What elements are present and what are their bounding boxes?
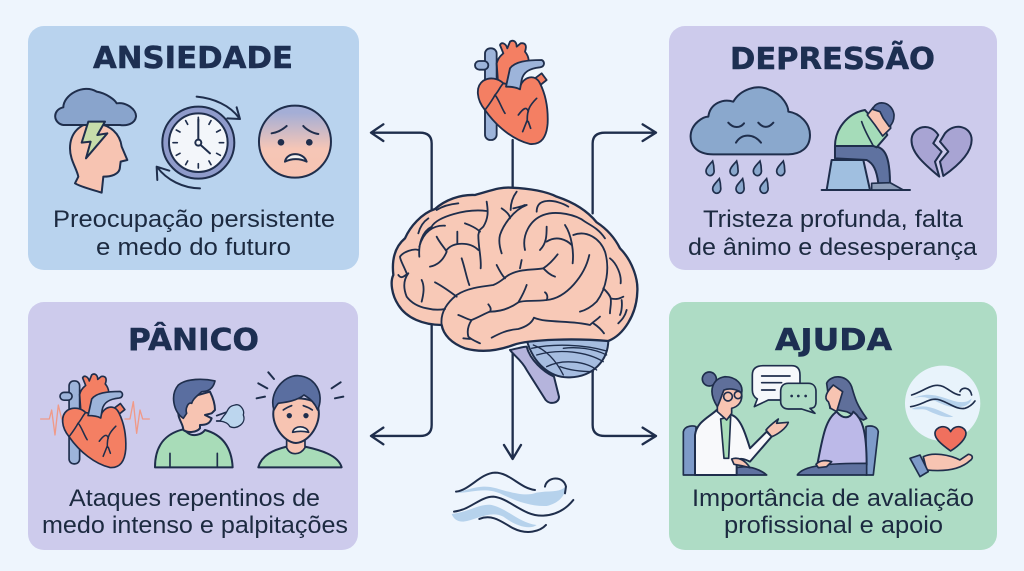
- heading: ansiedade: ANSIEDADE: [93, 41, 293, 76]
- text: depressão description line 2: de ânimo e desesperança: [688, 234, 977, 261]
- cerebrum: [392, 188, 637, 351]
- text: depressão description: Tristeza profunda, falta: [703, 206, 963, 233]
- icon: clock with arrows: [157, 97, 240, 188]
- arrows and connectors: [371, 124, 656, 459]
- text: pânico description: Ataques repentinos de: [69, 485, 320, 512]
- brain stem: [510, 347, 559, 403]
- text: ansiedade description: Preocupação persistente: [53, 206, 335, 233]
- icon: broken heart: [912, 127, 972, 177]
- panel: ansiedade: [28, 26, 359, 270]
- panel background: pânico: [28, 302, 358, 550]
- heading: pânico: PÂNICO: [128, 322, 259, 358]
- heading: ajuda: AJUDA: [775, 323, 892, 358]
- text: ajuda description: Importância de avaliação: [692, 485, 974, 512]
- panel: pânico: [28, 302, 358, 550]
- cerebellum: [527, 337, 608, 377]
- icon: doctor: [683, 372, 788, 475]
- icon: calm circle with heart in hand: [905, 366, 980, 477]
- icon: person sitting head in hands: [822, 103, 910, 190]
- text: ansiedade description line 2: e medo do futuro: [96, 234, 291, 261]
- panel background: depressão: [669, 26, 997, 270]
- panel: ajuda: [669, 302, 997, 550]
- brain illustration: [392, 188, 637, 403]
- icon: scared person: [257, 372, 343, 467]
- icon: worried face: [259, 106, 331, 178]
- icon: patient: [797, 377, 878, 475]
- icon: heart with pulse: [41, 374, 149, 468]
- heading: depressão: DEPRESSÃO: [730, 40, 935, 77]
- text: ajuda description line 2: profissional e apoio: [724, 512, 943, 539]
- icon: head with storm cloud: [55, 89, 136, 193]
- icon: person breathing: [155, 379, 244, 467]
- panel: depressão: [669, 26, 997, 270]
- icon: speech bubbles: [752, 366, 816, 413]
- panel background: ajuda: [669, 302, 997, 550]
- panel background: ansiedade: [28, 26, 359, 270]
- icon: sad rain cloud: [691, 87, 810, 193]
- text: pânico description line 2: medo intenso e palpitações: [42, 512, 348, 539]
- icon: calm waves: [452, 473, 573, 532]
- icon: central heart: [475, 41, 548, 144]
